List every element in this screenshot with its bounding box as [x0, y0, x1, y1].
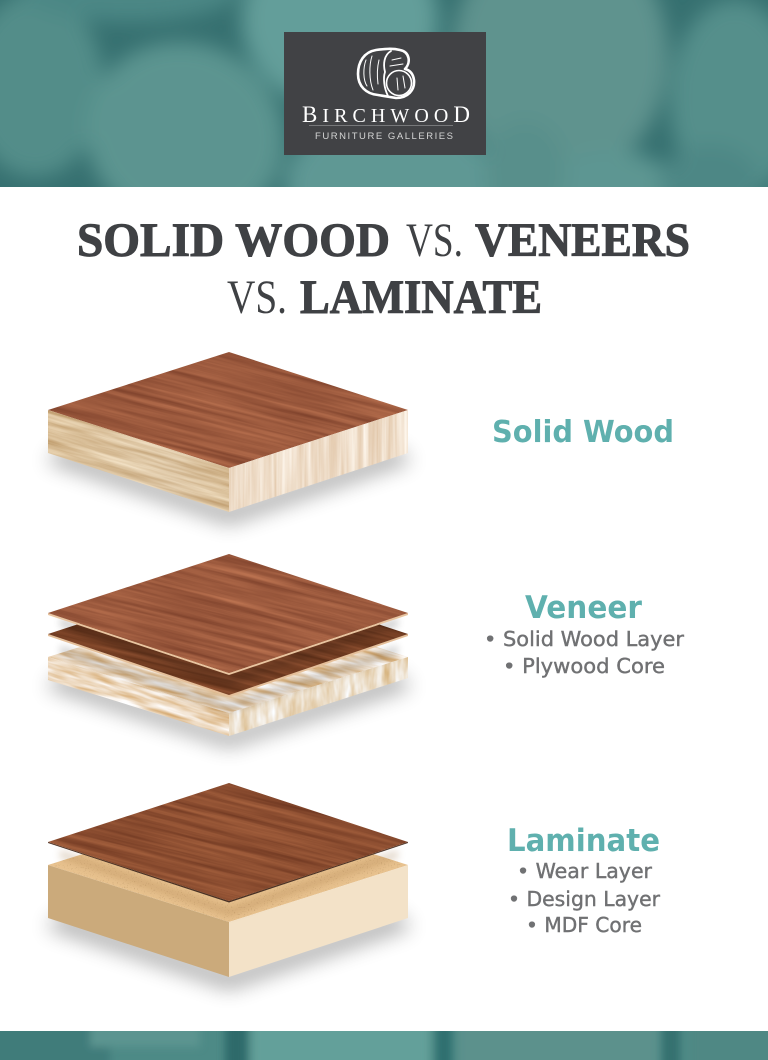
footer banner	[0, 1031, 768, 1060]
label: veneer: Veneer	[525, 590, 643, 626]
title: VS.	[406, 214, 463, 267]
MDF left face	[48, 865, 229, 977]
header banner: blurred teal logs	[0, 0, 768, 187]
logo tagline: FURNITURE GALLERIES	[315, 131, 453, 142]
label: veneer: • Solid Wood Layer	[484, 627, 685, 651]
title: VS.	[227, 271, 287, 324]
MDF right face	[229, 865, 408, 977]
laminate sheet	[48, 783, 408, 902]
illustration: solid wood block	[43, 352, 415, 534]
title	[77, 214, 690, 324]
second layer	[48, 624, 408, 696]
MDF top face	[48, 854, 408, 922]
label: laminate: • Design Layer	[508, 887, 661, 911]
top veneer sheet	[48, 554, 408, 675]
logo wordmark: B IRCHWOOD	[302, 102, 470, 127]
label: veneer	[484, 590, 685, 678]
illustration: laminate	[42, 783, 416, 1000]
label: laminate: • Wear Layer	[517, 859, 653, 883]
left face	[48, 410, 229, 512]
label: laminate: • MDF Core	[526, 913, 642, 937]
right face	[229, 410, 408, 512]
title: LAMINATE	[300, 271, 542, 324]
title: SOLID WOOD	[77, 214, 390, 267]
title: VENEERS	[475, 214, 690, 267]
label: laminate	[507, 823, 661, 937]
label: laminate: Laminate	[507, 823, 660, 859]
label: solid wood: Solid Wood	[492, 415, 674, 450]
top face	[48, 352, 408, 468]
icon: log forming letter B	[358, 49, 414, 98]
plywood core	[48, 646, 408, 736]
logo: Birchwood Furniture Galleries	[284, 32, 486, 155]
label: veneer: • Plywood Core	[503, 654, 665, 678]
illustration: veneer layers	[42, 554, 416, 758]
